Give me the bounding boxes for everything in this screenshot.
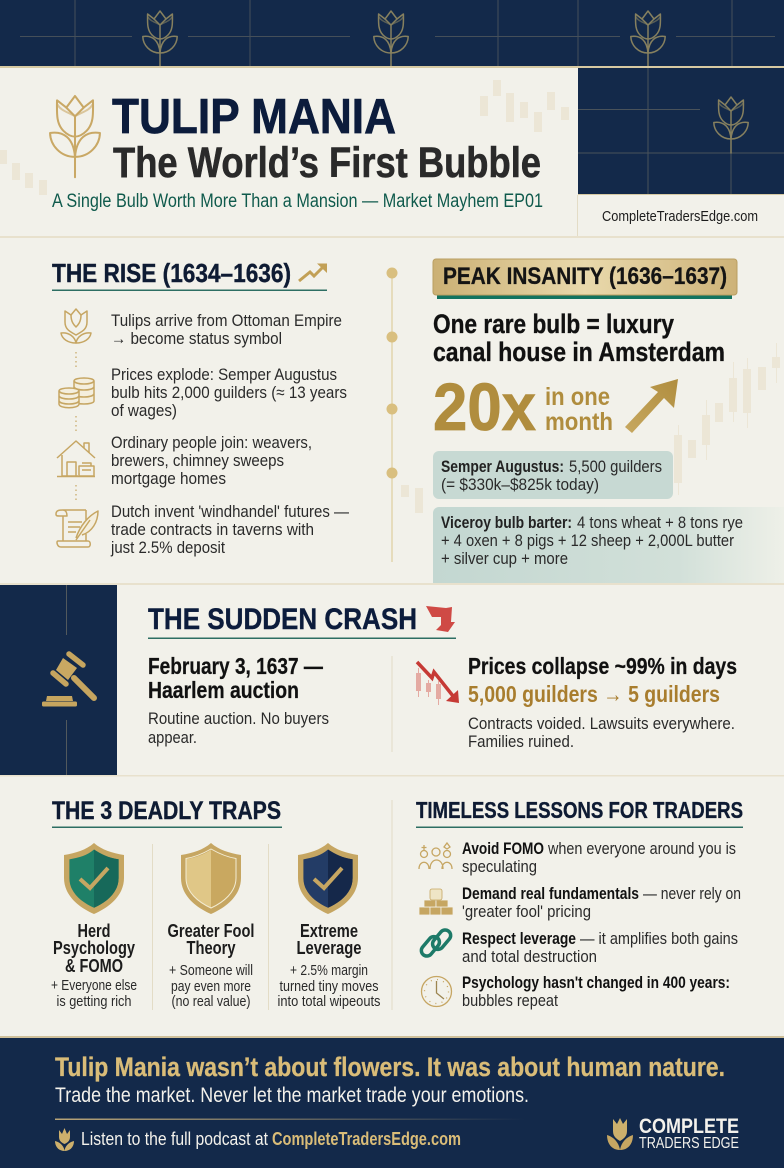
chart: falling candlesticks [416, 662, 459, 705]
text: prices collapse: 5,000 guilders → 5 guilders [468, 681, 720, 707]
badge: peak insanity heading: PEAK INSANITY (1636–1637) [443, 263, 727, 290]
heading: the rise: THE RISE (1634–1636) [52, 258, 291, 288]
text: psychology: bubbles repeat [462, 991, 558, 1010]
heading: the sudden crash: THE SUDDEN CRASH [148, 603, 417, 636]
text: ordinary people [111, 433, 312, 488]
trap: extreme leverage: turned tiny moves [280, 979, 378, 995]
icon: crowd [419, 843, 452, 869]
panel: the rise [52, 258, 349, 557]
icon: red crash arrow [426, 606, 455, 632]
trap: greater fool: (no real value) [172, 994, 250, 1010]
text: avoid fomo: Avoid FOMO [462, 839, 544, 858]
logo: complete traders edge: TRADERS EDGE [639, 1135, 739, 1152]
icon: gold shield [181, 843, 241, 914]
text: windhandel [110, 502, 349, 557]
website url: CompleteTradersEdge.com [602, 209, 758, 225]
callout: viceroy barter [433, 507, 784, 583]
subtitle: A Single Bulb Worth More Than a Mansion — Market Mayhem EP01 [52, 191, 543, 212]
podcast link: CompleteTradersEdge.com [272, 1129, 461, 1149]
text: real fundamentals: — never rely on [643, 884, 741, 903]
text: avoid fomo [462, 839, 736, 876]
trap: herd psychology: & FOMO [65, 956, 123, 976]
trap: extreme leverage [278, 843, 380, 1010]
icon: gavel [42, 654, 94, 706]
trap: greater fool: Greater Fool [168, 921, 254, 941]
trap: greater fool [168, 843, 254, 1010]
trap: herd psychology [51, 843, 137, 1010]
trap: extreme leverage: + 2.5% margin [290, 963, 368, 979]
text: february auction: appear. [148, 729, 197, 747]
headline: luxury canal house: One rare bulb = luxury [433, 309, 674, 339]
text: windhandel: trade contracts in taverns with [111, 520, 314, 539]
text: prices collapse: Families ruined. [468, 732, 574, 751]
title line two: The World’s First Bubble [113, 139, 541, 187]
icon: header tulip left [143, 11, 177, 67]
text: tulips arrive: Tulips arrive from Ottoman Empire [111, 311, 342, 330]
title panel [0, 66, 784, 237]
text: respect leverage [462, 929, 738, 966]
text: february auction: Haarlem auction [148, 677, 299, 703]
text: tulips arrive [111, 311, 342, 348]
text: prices explode: bulb hits 2,000 guilders (≈ 13 years [111, 383, 347, 402]
trap: herd psychology: + Everyone else [51, 978, 137, 994]
icon: coins [59, 378, 94, 408]
text: february auction: February 3, 1637 — [148, 653, 323, 679]
icon: header tulip right [631, 11, 665, 67]
text: prices explode: of wages) [111, 401, 177, 420]
badge: peak insanity heading [433, 259, 737, 299]
trap: herd psychology: Psychology [53, 938, 135, 958]
icon: chain [419, 928, 453, 958]
text: prices collapse: Contracts voided. Lawsuits everywhere. [468, 714, 735, 733]
text: prices collapse [468, 653, 737, 751]
headline: luxury canal house: canal house in Amsterdam [433, 337, 725, 367]
logo: complete traders edge: COMPLETE [639, 1115, 739, 1138]
stat: 20x in one month: 20x [433, 370, 536, 445]
text: prices collapse: Prices collapse ~99% in days [468, 653, 737, 679]
icon: clock [422, 976, 452, 1006]
trap: extreme leverage: Leverage [296, 938, 362, 958]
text: respect leverage: — it amplifies both gains [580, 929, 738, 948]
trap: greater fool: + Someone will [169, 963, 253, 979]
icon: green shield [64, 843, 124, 914]
icon: header tulip center [374, 11, 408, 67]
text: ordinary people: brewers, chimney sweeps [111, 451, 284, 470]
text: tulips arrive: → become status symbol [111, 329, 282, 348]
icon: tulip [61, 309, 91, 343]
text: windhandel: Dutch invent 'windhandel' futures — [111, 502, 349, 521]
callout: viceroy barter: 4 tons wheat + 8 tons rye [577, 514, 743, 532]
icon: navy shield [298, 843, 358, 914]
text: real fundamentals [462, 884, 741, 921]
text: windhandel: just 2.5% deposit [110, 538, 225, 557]
callout: viceroy barter: Viceroy bulb barter: [441, 514, 572, 532]
text: psychology [462, 973, 730, 1010]
icon: scroll and quill [56, 510, 98, 547]
trap: herd psychology: is getting rich [56, 994, 132, 1010]
headline: luxury canal house [433, 309, 725, 367]
podcast link: Listen to the full podcast at [81, 1129, 268, 1149]
arrow: rising gold [625, 379, 678, 433]
text: respect leverage: and total destruction [462, 947, 597, 966]
header band [0, 0, 784, 67]
trap: extreme leverage: into total wipeouts [278, 994, 380, 1010]
podcast link [81, 1129, 461, 1149]
panel: the sudden crash [0, 585, 737, 775]
panel: timeless lessons [416, 797, 743, 1010]
text: prices explode: Prices explode: Semper Augustus [111, 365, 337, 384]
callout: semper augustus: 5,500 guilders [569, 458, 662, 476]
icon: rising arrow [299, 264, 327, 281]
trap: extreme leverage: Extreme [300, 921, 358, 941]
callout: viceroy barter: + 4 oxen + 8 pigs + 12 sheep + 2,000L butter [441, 532, 734, 550]
icon: gold bars [419, 889, 453, 915]
stat: 20x in one month: in one [545, 383, 610, 411]
trap: herd psychology: Herd [78, 921, 110, 941]
logo: complete traders edge [607, 1115, 739, 1152]
panel: the 3 deadly traps [51, 797, 380, 1010]
callout: viceroy barter: + silver cup + more [441, 550, 568, 568]
footer band [0, 1036, 784, 1168]
text: real fundamentals: Demand real fundamentals [462, 884, 639, 903]
text: avoid fomo: speculating [462, 857, 537, 876]
heading: deadly traps: THE 3 DEADLY TRAPS [52, 797, 281, 825]
callout: semper augustus: Semper Augustus: [441, 458, 564, 476]
callout: semper augustus: (= $330k–$825k today) [441, 476, 599, 494]
text: february auction: Routine auction. No buyers [148, 710, 329, 728]
navy corner panel [578, 68, 784, 195]
timeline [386, 268, 398, 562]
text: ordinary people: mortgage homes [111, 469, 226, 488]
trap: greater fool: pay even more [171, 979, 251, 995]
stat: 20x in one month [433, 370, 613, 445]
icon: corner tulip [714, 97, 748, 153]
icon: main tulip [50, 96, 100, 177]
text: prices explode [111, 365, 347, 420]
stat: 20x in one month: month [545, 408, 613, 436]
icon: small gold tulip [55, 1128, 74, 1151]
panel: peak insanity [401, 259, 784, 583]
text: respect leverage: Respect leverage [462, 929, 576, 948]
text: ordinary people: Ordinary people join: weavers, [111, 433, 312, 452]
text: real fundamentals: 'greater fool' pricing [462, 902, 591, 921]
icon: house [57, 441, 95, 476]
text: february auction [148, 653, 329, 747]
text: psychology: Psychology hasn't changed in 400 years: [462, 973, 730, 992]
trap: greater fool: Theory [186, 938, 236, 958]
title line one: TULIP MANIA [112, 90, 396, 144]
callout: semper augustus [433, 451, 673, 499]
footer tagline: Trade the market. Never let the market trade your emotions. [55, 1084, 529, 1107]
text: avoid fomo: when everyone around you is [547, 839, 736, 858]
